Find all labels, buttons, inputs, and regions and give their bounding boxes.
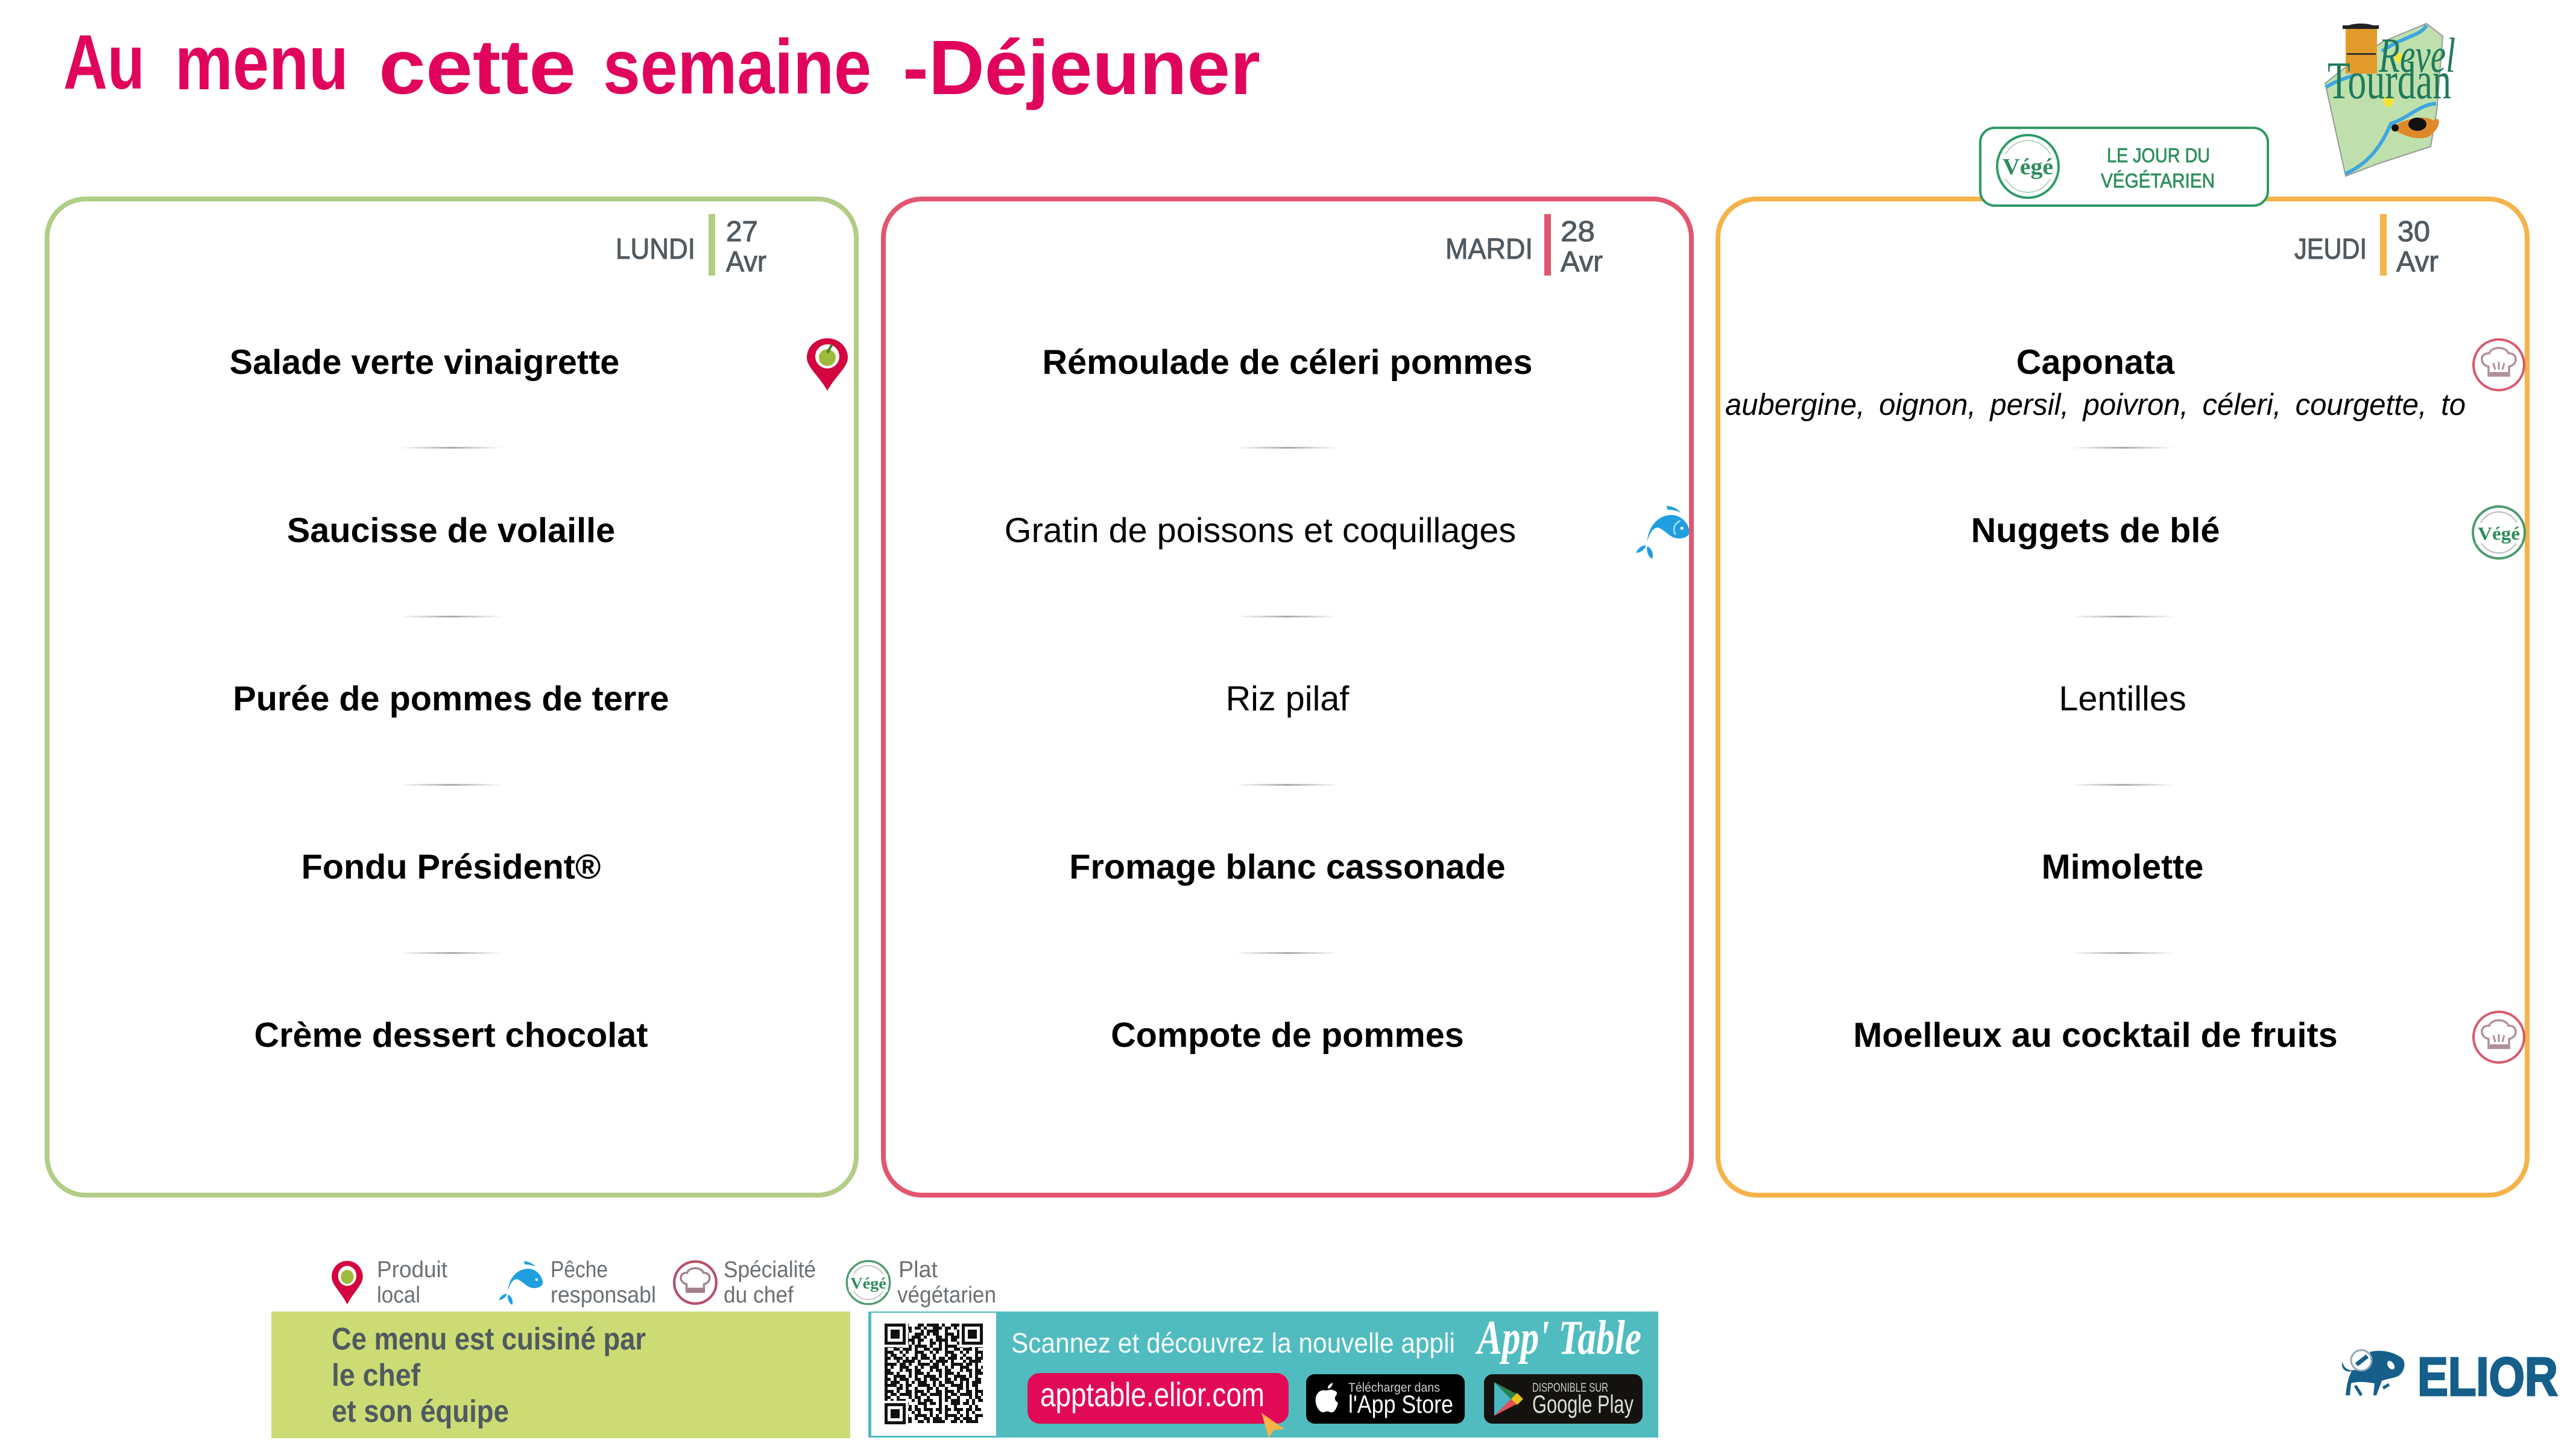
App' Table wordmark: App' Table [1475, 1312, 1641, 1365]
dish: Salade verte vinaigrette: Salade verte vinaigrette [230, 343, 619, 382]
header: lundi 27 Avr: 27 [726, 216, 758, 248]
legend: spécialité du chef: Spécialité [724, 1257, 816, 1283]
banner caption: Scannez et découvrez la nouvelle appli [1011, 1327, 1455, 1359]
legend: pêche responsable [499, 1257, 656, 1308]
button: App Store: l'App Store [1348, 1390, 1453, 1418]
icon: pêche responsable [1636, 506, 1690, 559]
badge: le jour du végétarien: Végé [2003, 154, 2053, 180]
legend: produit local: Produit [377, 1257, 447, 1283]
legend: plat végétarien: Plat [898, 1257, 938, 1283]
header: jeudi 30 Avr: Avr [2396, 246, 2439, 278]
legend: plat végétarien: végétarien [897, 1283, 996, 1308]
panel: lundi [47, 199, 856, 1195]
badge: le jour du végétarien: LE JOUR DU [2107, 144, 2210, 166]
panel: mardi [883, 199, 1691, 1195]
title: cette [379, 24, 576, 110]
panel: jeudi [1718, 199, 2527, 1195]
legend: plat végétarien: Végé [850, 1275, 886, 1292]
icon: spécialité du chef [2473, 339, 2524, 390]
button: Google Play [1484, 1374, 1643, 1424]
title: -Déjeuner [903, 25, 1260, 111]
header: mardi 28 Avr: 28 [1561, 216, 1595, 248]
dish: Nuggets de blé: Nuggets de blé [1971, 511, 2220, 550]
dish: Rémoulade de céleri pommes: Rémoulade de céleri pommes [1042, 343, 1533, 382]
title: menu [175, 20, 349, 106]
header: lundi 27 Avr: Avr [726, 246, 766, 278]
legend: pêche responsable: Pêche [551, 1257, 608, 1283]
dish: Saucisse de volaille: Saucisse de volaille [287, 511, 615, 550]
button: Google Play: Google Play [1532, 1390, 1634, 1418]
footer: chef banner: Ce menu est cuisiné par [332, 1322, 646, 1357]
logo: Revel Tourdan: Tourdan [2328, 52, 2451, 110]
header: jeudi 30 Avr [2294, 214, 2439, 278]
dish: Gratin de poissons et coquillages: Gratin de poissons et coquillages [1005, 511, 1516, 550]
badge: le jour du végétarien: VÉGÉTARIEN [2101, 169, 2215, 192]
icon: plat végétarien [2473, 507, 2525, 558]
header: mardi 28 Avr: MARDI [1445, 233, 1533, 265]
dish: Compote de pommes: Compote de pommes [1111, 1016, 1464, 1055]
logo: Elior [2342, 1347, 2558, 1407]
header: lundi 27 Avr: LUNDI [616, 233, 695, 265]
header: lundi 27 Avr [616, 214, 766, 278]
dish: Fondu Président: Fondu Président® [301, 848, 601, 886]
button: App Store [1306, 1374, 1465, 1424]
badge: le jour du végétarien [1980, 128, 2268, 206]
logo: Revel Tourdan [2325, 24, 2455, 176]
title [63, 19, 1260, 111]
button: Google Play: DISPONIBLE SUR [1532, 1381, 1608, 1395]
dish: Mimolette: Mimolette [2042, 848, 2203, 886]
dish: Moelleux au cocktail de fruits: Moelleux au cocktail de fruits [1853, 1016, 2338, 1055]
title: semaine [603, 24, 871, 110]
dish: Purée de pommes de terre: Purée de pommes de terre [233, 680, 669, 718]
dish: Lentilles: Lentilles [2059, 680, 2186, 718]
icon: produit local [807, 338, 848, 391]
QR code [885, 1325, 983, 1422]
legend: produit local: local [377, 1283, 420, 1308]
header: mardi 28 Avr: Avr [1561, 246, 1603, 278]
button: apptable.elior.com [1028, 1373, 1289, 1438]
header: jeudi 30 Avr: JEUDI [2294, 233, 2367, 265]
header: mardi 28 Avr [1445, 214, 1603, 278]
button: App Store: Télécharger dans [1348, 1381, 1440, 1395]
icon: spécialité du chef, dessert [2473, 1012, 2524, 1062]
dish: Caponata: Caponata [2016, 343, 2175, 382]
legend: spécialité du chef: du chef [724, 1283, 794, 1308]
QR finder patterns [884, 1323, 983, 1425]
title: Au [63, 19, 145, 106]
footer: chef banner [271, 1312, 850, 1438]
footer: App'Table banner [868, 1312, 1658, 1438]
legend [332, 1257, 996, 1308]
button: apptable.elior.com: apptable.elior.com [1040, 1375, 1264, 1413]
dish: Fromage blanc cassonade: Fromage blanc cassonade [1069, 848, 1506, 886]
logo: Revel Tourdan: Revel [2378, 28, 2455, 83]
legend: plat végétarien [847, 1257, 996, 1308]
legend: produit local [332, 1257, 447, 1308]
icon: plat végétarien: Végé [2478, 523, 2520, 544]
dish: Crème dessert chocolat: Crème dessert chocolat [254, 1016, 648, 1055]
footer: chef banner: le chef [332, 1358, 421, 1393]
footer: chef banner: et son équipe [332, 1394, 509, 1429]
dish: Riz pilaf: Riz pilaf [1226, 680, 1350, 718]
dish description: Caponata ingredients: aubergine, oignon, persil, poivron, céleri, courgette, to [1725, 388, 2466, 421]
legend: spécialité du chef [674, 1257, 816, 1308]
header: jeudi 30 Avr: 30 [2398, 216, 2430, 248]
legend: pêche responsable: responsabl [551, 1283, 656, 1308]
